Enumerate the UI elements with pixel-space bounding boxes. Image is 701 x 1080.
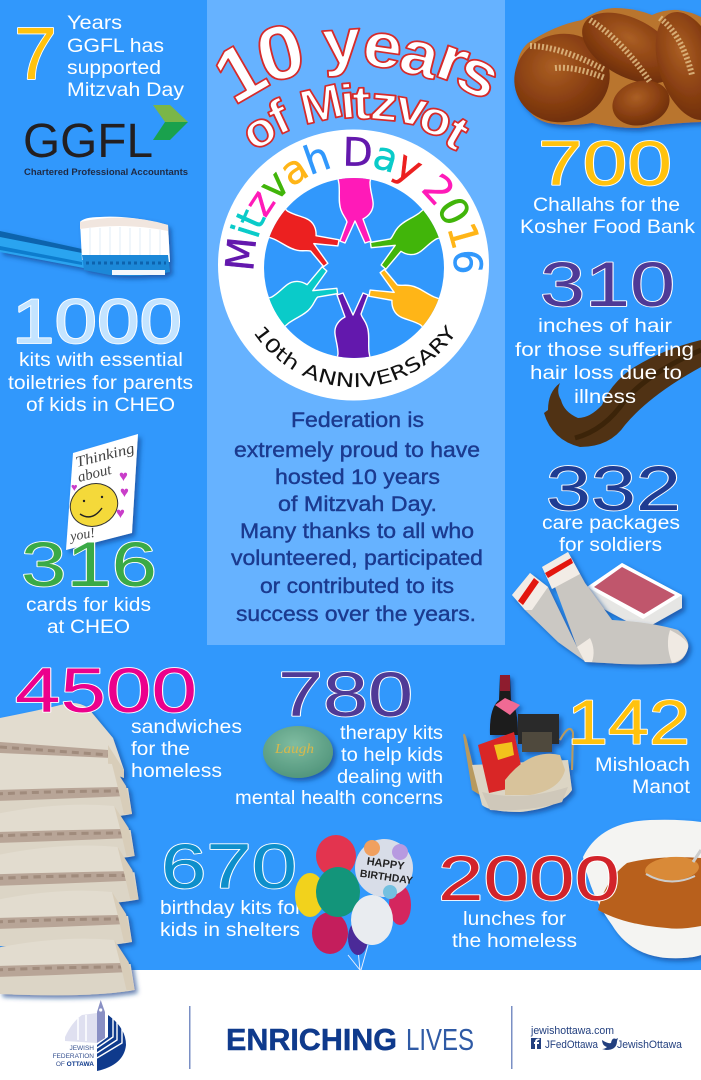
stat: 1000 kits: kits with essential: [19, 350, 183, 371]
federation message: [231, 409, 483, 626]
stat: 316 cards: 316: [21, 530, 157, 600]
title: 10 years of Mitzvot: t: [436, 105, 479, 161]
contact details: JewishOttawa: [617, 1039, 683, 1051]
stat: 780 therapy kits: to help kids: [341, 745, 443, 766]
federation message: of Mitzvah Day.: [278, 493, 437, 516]
icon: thinking about you card: about: [76, 462, 114, 486]
Jewish Federation of Ottawa logo: FEDERATION: [53, 1053, 94, 1060]
federation message: hosted 10 years: [275, 466, 440, 489]
icon: thinking about you card: ♥: [71, 482, 78, 494]
footer divider left: [189, 1006, 190, 1069]
icon: soup bowl: [583, 820, 701, 958]
footer divider right: [511, 1006, 512, 1069]
icon: mishloach manot basket: [463, 675, 573, 812]
center panel: [207, 0, 505, 645]
title: 10 years of Mitzvot: f: [260, 89, 299, 145]
hands forming star: [269, 178, 439, 358]
title: 10 years of Mitzvot: 0: [247, 5, 313, 100]
federation message: Many thanks to all who: [240, 520, 474, 543]
icon: thinking about you card: ♥: [119, 468, 128, 485]
stat: 7 years GGFL: Mitzvah Day: [67, 80, 185, 101]
title: 10 years of Mitzvot: t: [351, 75, 372, 130]
icon: challah bread: [504, 0, 701, 133]
stat: 7 years GGFL: Years: [67, 13, 122, 34]
stat: 670 birthday kits: 670: [161, 832, 297, 902]
federation message: volunteered, participated: [231, 547, 483, 570]
stat: 7 years GGFL: 7: [14, 12, 57, 95]
title: 10 years of Mitzvot: 1: [199, 24, 281, 120]
stat: 310 inches of hair: 310: [540, 250, 675, 320]
icon: sandwich stack: [0, 703, 139, 995]
stat: 7 years GGFL: [14, 12, 185, 101]
stat: 4500 sandwiches: homeless: [131, 761, 222, 782]
stat: 670 birthday kits: birthday kits for: [160, 898, 303, 919]
title: 10 years of Mitzvot: s: [446, 33, 512, 114]
stat: 780 therapy kits: [235, 660, 443, 809]
icon: balloons: BIRTHDAY: [359, 868, 414, 887]
slogan: Enriching Lives: LIVES: [406, 1022, 474, 1057]
icon: lock of hair: [544, 340, 701, 447]
stat: 142 mishloach manot: [567, 688, 691, 798]
icon: thinking about you card: Thinking: [74, 441, 137, 471]
stat: 4500 sandwiches: for the: [131, 739, 190, 760]
stat: 142 mishloach manot: 142: [567, 688, 690, 758]
sock pair: [512, 552, 688, 664]
playing cards: [587, 563, 682, 630]
Jewish Federation of Ottawa logo: OF OTTAWA: [56, 1061, 94, 1068]
stat: 310 inches of hair: [515, 250, 694, 408]
stat: 332 care packages: for soldiers: [559, 535, 662, 556]
stat: 7 years GGFL: supported: [67, 58, 161, 79]
stat: 2000 lunches: [438, 844, 620, 952]
stat: 700 challahs: 700: [538, 129, 672, 199]
GGFL logo: Chartered Professional Accountants: [24, 167, 188, 178]
stat: 1000 kits: 1000: [12, 287, 182, 357]
stat: 316 cards: cards for kids: [26, 595, 151, 616]
stat: 332 care packages: [542, 454, 681, 556]
stat: 2000 lunches: 2000: [438, 844, 620, 914]
icon: laugh stone: Laugh: [274, 742, 314, 757]
icon: thinking about you card: ♥: [116, 505, 125, 522]
stat: 310 inches of hair: for those suffering: [515, 340, 694, 361]
Jewish Federation of Ottawa logo: JEWISH: [69, 1045, 94, 1052]
stat: 670 birthday kits: [160, 832, 303, 941]
icon: toothbrush: [0, 217, 170, 276]
icon: balloons: [295, 835, 414, 970]
stat: 700 challahs: [520, 129, 696, 238]
logo arc text: 10th Anniversary: 10th ANNIVERSARY: [254, 324, 454, 388]
stat: 310 inches of hair: hair loss due to: [530, 363, 682, 384]
Jewish Federation of Ottawa logo: [53, 1000, 126, 1071]
stat: 2000 lunches: lunches for: [463, 909, 567, 930]
stat: 316 cards: at CHEO: [47, 617, 130, 638]
icon: twitter bird: [602, 1038, 618, 1050]
stat: 310 inches of hair: illness: [574, 387, 636, 408]
stat: 780 therapy kits: dealing with: [337, 767, 443, 788]
stat: 7 years GGFL: GGFL has: [67, 36, 164, 57]
stat: 142 mishloach manot: Mishloach: [595, 755, 690, 776]
title: 10 years of Mitzvot: r: [428, 21, 479, 98]
balloons: [348, 921, 368, 955]
stat: 4500 sandwiches: [15, 656, 242, 782]
title: 10 years of Mitzvot: i: [338, 74, 358, 129]
logo inner blue disc: [264, 178, 444, 358]
icon: balloons: HAPPY: [366, 856, 406, 873]
icon: thinking about you card: you!: [67, 526, 97, 545]
stat: 1000 kits: [8, 287, 193, 416]
title: 10 years of Mitzvot: [199, 5, 512, 161]
stat: 4500 sandwiches: sandwiches: [131, 717, 242, 738]
stat: 142 mishloach manot: Manot: [632, 777, 691, 798]
contact details: [530, 1025, 683, 1051]
title: 10 years of Mitzvot: v: [392, 78, 432, 137]
logo white disc: [218, 130, 489, 400]
logo arc text: Mitzvah Day 2016: Mitzvah Day 2016: [224, 136, 484, 272]
contact details: JFedOttawa: [545, 1039, 599, 1051]
federation message: extremely proud to have: [234, 439, 480, 462]
title: 10 years of Mitzvot: z: [368, 75, 401, 131]
footer band: [0, 970, 701, 1080]
title: 10 years of Mitzvot: o: [413, 88, 459, 149]
federation message: Federation is: [291, 409, 424, 432]
icon: socks and playing cards: [512, 552, 688, 664]
federation message: or contributed to its: [260, 575, 454, 598]
icon: thinking about you card: [64, 434, 138, 550]
stat: 332 care packages: care packages: [542, 513, 680, 534]
federation message: success over the years.: [236, 603, 476, 626]
contact details: jewishottawa.com: [530, 1025, 614, 1037]
stat: 332 care packages: 332: [546, 454, 681, 524]
title: 10 years of Mitzvot: e: [359, 8, 407, 84]
stat: 1000 kits: toiletries for parents: [8, 373, 193, 394]
stat: 310 inches of hair: inches of hair: [538, 316, 673, 337]
title: 10 years of Mitzvot: y: [320, 6, 363, 79]
stat: 2000 lunches: the homeless: [452, 931, 577, 952]
title: 10 years of Mitzvot: a: [393, 15, 448, 93]
GGFL logo: GGFL: [23, 115, 153, 168]
slogan: Enriching Lives: ENRICHING: [226, 1022, 397, 1057]
balloon strings: [348, 945, 368, 970]
stat: 780 therapy kits: therapy kits: [340, 723, 443, 744]
icon: thinking about you card: ♥: [120, 484, 129, 501]
stat: 700 challahs: Kosher Food Bank: [520, 217, 696, 238]
icon: laugh stone: [263, 726, 333, 778]
title: 10 years of Mitzvot: M: [295, 73, 348, 135]
Mitzvah Day logo: [218, 130, 489, 400]
stat: 316 cards: [21, 530, 157, 638]
stat: 780 therapy kits: mental health concerns: [235, 788, 443, 809]
stat: 780 therapy kits: 780: [278, 660, 413, 730]
stat: 670 birthday kits: kids in shelters: [160, 920, 300, 941]
stat: 1000 kits: of kids in CHEO: [26, 395, 175, 416]
title: 10 years of Mitzvot: o: [232, 99, 286, 161]
stat: 4500 sandwiches: 4500: [15, 656, 197, 726]
icon: facebook: [531, 1038, 541, 1049]
GGFL logo: [23, 105, 188, 178]
stat: 700 challahs: Challahs for the: [533, 195, 680, 216]
